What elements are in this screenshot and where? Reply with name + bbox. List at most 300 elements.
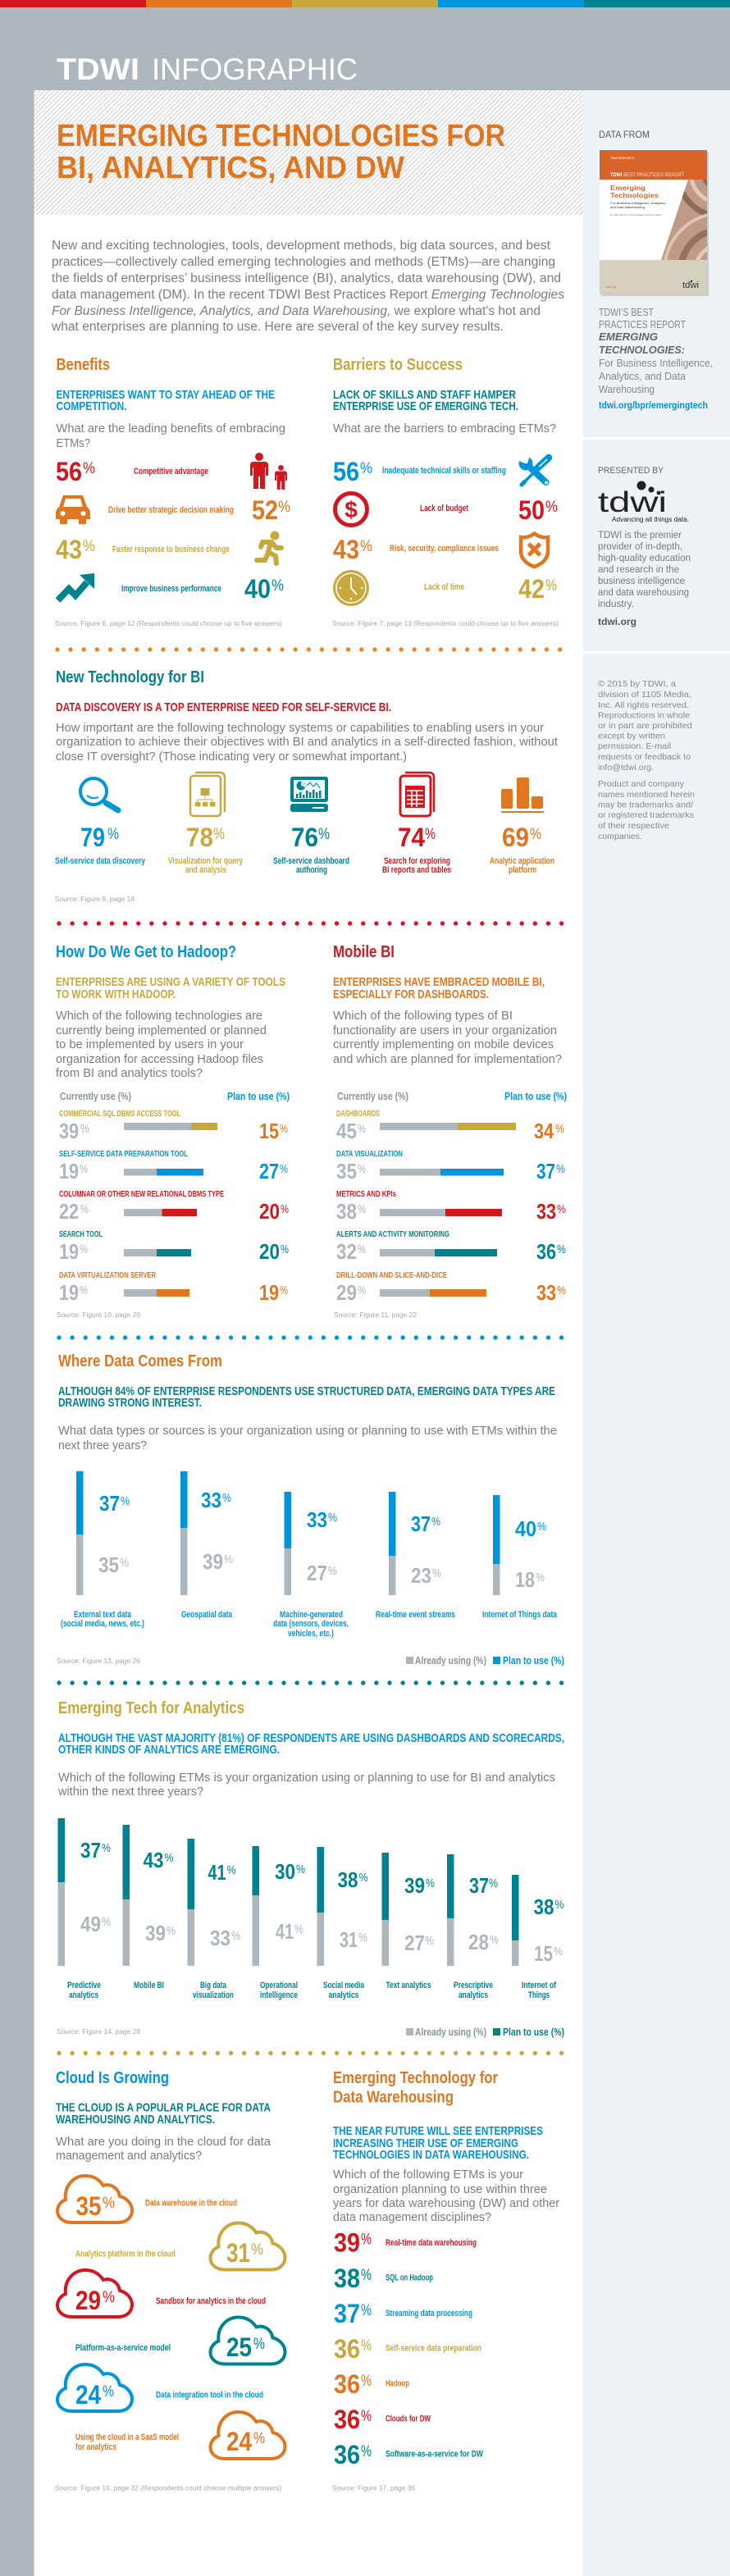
sidebar panel: presented by: and research in the xyxy=(598,565,679,575)
stat: Hadoop 36% xyxy=(334,2369,409,2399)
row: data visualization xyxy=(336,1149,565,1183)
bar: operational intelligence xyxy=(253,1846,305,2000)
source: benefits: Source: Figure 6, page 12 (Respondents could choose up to five answers) xyxy=(55,619,282,627)
sidebar panel: data from: Warehousing xyxy=(599,384,655,395)
question: cloud xyxy=(56,2135,271,2163)
report cover: TDWI BEST PRACTICES REPORT xyxy=(610,172,684,178)
subhead: analytics: OTHER KINDS OF ANALYTICS ARE EMERGING. xyxy=(58,1744,280,1757)
panel: new technology for BI xyxy=(55,668,559,903)
row: data visualization: DATA VISUALIZATION xyxy=(336,1149,403,1159)
stat: technical skills 56%: 56 xyxy=(333,457,359,486)
row: self-service data preparation: SELF-SERVICE DATA PREPARATION TOOL xyxy=(59,1149,188,1159)
subhead: data types xyxy=(58,1385,555,1410)
subhead: cloud xyxy=(56,2101,271,2127)
panel: emerging technology for data warehousing xyxy=(332,2069,559,2492)
panel: hadoop xyxy=(56,943,290,1319)
icon: dollar xyxy=(335,494,367,525)
cloud: sandbox 29%: Sandbox for analytics in the cloud xyxy=(156,2296,266,2306)
stat: streaming data processing 37%: % xyxy=(361,2302,372,2319)
stat: analytic application: % xyxy=(530,826,541,843)
subhead: benefits: ENTERPRISES WANT TO STAY AHEAD OF THE xyxy=(56,389,275,402)
row: commercial SQL: % xyxy=(280,1122,288,1136)
stat: SQL on Hadoop 38%: SQL on Hadoop xyxy=(386,2273,433,2283)
row: metrics and KPIs: % xyxy=(557,1202,566,1216)
bar: machine-generated data: % xyxy=(328,1564,337,1578)
cloud: sandbox 29%: % xyxy=(103,2289,115,2306)
cloud: data integration 24%: % xyxy=(103,2383,114,2400)
question: hadoop: from BI and analytics tools? xyxy=(56,1066,203,1080)
bar: big data visualization: % xyxy=(231,1929,240,1943)
heading: barriers: Barriers to Success xyxy=(333,356,463,374)
stat: Hadoop 36%: Hadoop xyxy=(386,2378,409,2388)
bar: prescriptive analytics: Prescriptive xyxy=(454,1981,493,1990)
tdwi logo xyxy=(598,481,689,523)
icon: clock xyxy=(333,570,369,606)
question: self-service: close IT oversight? (Those indicating very or somewhat important.) xyxy=(56,750,407,764)
cloud: data integration 24%: 24 xyxy=(75,2380,101,2410)
sidebar panel: presented by xyxy=(583,440,730,651)
colour stripe xyxy=(0,0,730,7)
question: hadoop: organization for accessing Hadoop files xyxy=(56,1052,263,1066)
bar: mobile BI: % xyxy=(167,1924,176,1938)
sidebar panel: copyright: companies. xyxy=(598,832,642,841)
row: dashboards: DASHBOARDS xyxy=(336,1109,380,1119)
subhead: cloud: WAREHOUSING AND ANALYTICS. xyxy=(56,2113,215,2127)
icon: document hierarchy xyxy=(190,773,225,816)
stat: self-service data discovery: 79 xyxy=(80,823,105,852)
subhead: data discovery: DATA DISCOVERY IS A TOP ENTERPRISE NEED FOR SELF-SERVICE BI. xyxy=(56,701,391,714)
report cover: and Data Warehousing xyxy=(610,205,645,209)
bar: machine-generated data: 33 xyxy=(307,1507,327,1532)
bar: text analytics: % xyxy=(425,1934,434,1948)
bar: social media analytics: 31 xyxy=(340,1927,358,1952)
icon: runner xyxy=(257,531,281,563)
row: columnar: 20 xyxy=(259,1199,280,1224)
sidebar panel: copyright: Reproductions in whole xyxy=(598,710,690,720)
stat: search: % xyxy=(425,826,436,843)
stat: dashboard authoring: 76 xyxy=(291,823,318,852)
icon: monitor dashboard xyxy=(290,777,328,812)
stat: streaming data processing 37%: Streaming data processing xyxy=(386,2309,472,2318)
row: commercial SQL: % xyxy=(80,1122,89,1136)
subhead: data warehousing: TECHNOLOGIES IN DATA WAREHOUSING. xyxy=(333,2149,529,2162)
bar: internet of things data: % xyxy=(536,1571,545,1584)
question: data warehousing: years for data warehousing (DW) and other xyxy=(333,2196,559,2210)
sidebar panel: copyright: permission. E-mail xyxy=(598,741,671,751)
question: data warehousing: data management disciplines? xyxy=(333,2210,491,2224)
cloud: data warehouse 35%: % xyxy=(103,2195,115,2212)
cloud: analytics platform 31% xyxy=(75,2223,285,2270)
heading: data warehousing: Data Warehousing xyxy=(333,2088,454,2106)
sidebar panel: data from: For Business Intelligence, xyxy=(599,358,713,369)
row: search tool: SEARCH TOOL xyxy=(59,1229,103,1239)
stat: Hadoop 36%: % xyxy=(361,2373,372,2390)
stat: strategic decision making 52%: 52 xyxy=(252,495,278,525)
legend: analytics: Already using (%) xyxy=(415,2026,486,2038)
stat: self-service data discovery: Self-service data discovery xyxy=(55,856,146,866)
question: cloud: What are you doing in the cloud for data xyxy=(56,2135,271,2149)
stat: dashboard authoring: Self-service dashboard xyxy=(273,856,349,866)
row: columnar: COLUMNAR OR OTHER NEW RELATIONAL DBMS TYPE xyxy=(59,1189,224,1199)
stat: faster response 43%: 43 xyxy=(56,535,82,564)
subhead: mobile BI: ENTERPRISES HAVE EMBRACED MOBILE BI, xyxy=(333,976,545,989)
bar: text analytics xyxy=(382,1853,435,1990)
bar: internet of things: Things xyxy=(528,1990,550,2000)
stat: visualization: and analysis xyxy=(185,865,226,875)
sidebar panel: presented by: and data warehousing xyxy=(598,588,689,598)
sidebar panel: copyright: except by written xyxy=(598,732,665,741)
question: barriers: What are the barriers to embracing ETMs? xyxy=(333,422,556,435)
stat: streaming data processing 37% xyxy=(334,2299,472,2328)
bar: operational intelligence: intelligence xyxy=(260,1990,298,2000)
stat: clouds for DW 36%: % xyxy=(361,2408,372,2425)
subhead: mobile BI: ESPECIALLY FOR DASHBOARDS. xyxy=(333,988,489,1001)
column headers: mobile BI xyxy=(337,1090,567,1102)
bar: geospatial data: Geospatial data xyxy=(181,1610,233,1620)
bar: mobile BI: 43 xyxy=(143,1848,164,1872)
row: alerts and activity monitoring: 36 xyxy=(536,1239,556,1264)
subhead: data types: DRAWING STRONG INTEREST. xyxy=(58,1397,202,1410)
subhead: data warehousing: THE NEAR FUTURE WILL SEE ENTERPRISES xyxy=(333,2125,543,2138)
stat: business performance 40%: Improve business performance xyxy=(121,584,221,594)
bar: mobile BI xyxy=(123,1825,176,1990)
row: self-service data preparation xyxy=(59,1149,288,1183)
stat: streaming data processing 37%: 37 xyxy=(334,2299,360,2328)
legend: analytics: Plan to use (%) xyxy=(503,2026,564,2038)
bar: machine-generated data xyxy=(273,1492,349,1639)
row: drill-down: DRILL-DOWN AND SLICE-AND-DICE xyxy=(336,1270,447,1280)
cloud: SaaS 24% xyxy=(75,2412,285,2459)
heading: where data comes from: Where Data Comes From xyxy=(58,1352,222,1370)
question: data types: What data types or sources is your organization using or planning to use with ETMs within the xyxy=(58,1424,557,1438)
bar: text analytics: Text analytics xyxy=(386,1981,431,1990)
stat: visualization: 78 xyxy=(186,823,213,852)
subhead: cloud: THE CLOUD IS A POPULAR PLACE FOR DATA xyxy=(56,2101,271,2114)
report cover: tdwi xyxy=(682,280,699,290)
icon: shield xyxy=(521,533,548,567)
question: analytics xyxy=(57,1771,555,1799)
sidebar panel: presented by: PRESENTED BY xyxy=(598,466,664,476)
question: cloud: management and analytics? xyxy=(56,2149,202,2163)
sidebar panel: data from: Analytics, and Data xyxy=(599,371,686,382)
stat: strategic decision making 52% xyxy=(108,495,290,525)
bar: internet of things: 38 xyxy=(533,1894,554,1919)
row: alerts and activity monitoring: ALERTS AND ACTIVITY MONITORING xyxy=(336,1229,449,1239)
bar: real-time event streams xyxy=(376,1492,455,1620)
masthead: TDWI Infographic: TDWI xyxy=(57,52,139,86)
stat: real-time data warehousing 39%: % xyxy=(361,2231,372,2249)
row: commercial SQL: 15 xyxy=(259,1119,279,1143)
bar: external text data: 35 xyxy=(98,1552,119,1577)
heading: data warehousing xyxy=(333,2069,498,2106)
title banner: BI, ANALYTICS, AND DW xyxy=(57,151,404,185)
row: metrics and KPIs: % xyxy=(358,1202,366,1216)
bar: external text data: External text data xyxy=(74,1610,132,1620)
bar: predictive analytics: % xyxy=(102,1915,111,1929)
stat: budget 50%: % xyxy=(545,499,558,516)
report cover: TDWI RESEARCH xyxy=(610,157,635,160)
row: dashboards: % xyxy=(555,1122,564,1136)
row: search tool: 20 xyxy=(259,1239,280,1264)
question: mobile BI: currently implementing on mobile devices xyxy=(333,1037,554,1051)
stat: faster response 43% xyxy=(56,535,230,564)
row: drill-down: % xyxy=(557,1283,566,1297)
sidebar panel: data from xyxy=(583,90,730,437)
question: hadoop: currently being implemented or planned xyxy=(56,1024,267,1037)
source: data warehousing: Source: Figure 17, page 36 xyxy=(332,2483,415,2492)
row: search tool: 19 xyxy=(59,1239,79,1264)
bar: social media analytics: Social media xyxy=(323,1981,365,1990)
cloud: data integration 24% xyxy=(57,2364,263,2411)
bar: operational intelligence: 41 xyxy=(276,1919,294,1944)
row: dashboards xyxy=(336,1109,564,1143)
stat: software-as-a-service for DW 36% xyxy=(334,2440,483,2469)
stat: search: Search for exploring xyxy=(384,856,450,866)
subhead: data types: ALTHOUGH 84% OF ENTERPRISE RESPONDENTS USE STRUCTURED DATA, EMERGING DATA TYPES ARE xyxy=(58,1385,555,1398)
sidebar panel: copyright: requests or feedback to xyxy=(598,752,691,762)
bar: internet of things data: 18 xyxy=(515,1567,535,1592)
cloud: platform as a service 25% xyxy=(75,2318,285,2364)
icon: upward arrow xyxy=(57,573,94,600)
stat: strategic decision making 52%: % xyxy=(278,499,290,516)
heading: cloud: Cloud Is Growing xyxy=(56,2069,169,2087)
sidebar panel: copyright: Product and company xyxy=(598,779,685,789)
title banner: EMERGING TECHNOLOGIES FOR xyxy=(57,119,505,153)
subhead: hadoop xyxy=(56,976,285,1001)
cloud: SaaS 24%: for analytics xyxy=(75,2442,116,2452)
stat: risk 43%: Risk, security, compliance issues xyxy=(390,544,499,554)
subhead: barriers: ENTERPRISE USE OF EMERGING TECH. xyxy=(333,400,518,413)
bar: machine-generated data: 27 xyxy=(307,1561,327,1585)
bar: social media analytics: % xyxy=(358,1931,367,1945)
source: hadoop: Source: Figure 10, page 20 xyxy=(57,1311,140,1319)
question: hadoop: to be implemented by users in your xyxy=(56,1037,244,1051)
intro text: what enterprises are planning to use. Here are several of the key survey results. xyxy=(51,320,504,334)
cloud: data integration 24%: Data integration tool in the cloud xyxy=(156,2390,263,2400)
bar: geospatial data: % xyxy=(224,1552,233,1566)
cloud: SaaS 24%: Using the cloud in a SaaS model xyxy=(75,2432,179,2442)
row: alerts and activity monitoring: 32 xyxy=(336,1239,357,1264)
bar: real-time event streams: 23 xyxy=(411,1563,431,1588)
bar: internet of things: Internet of xyxy=(522,1981,556,1990)
stat: software-as-a-service for DW 36%: % xyxy=(361,2443,372,2460)
sidebar panel: presented by: business intelligence xyxy=(598,577,685,586)
stat: time 42%: Lack of time xyxy=(424,582,464,592)
stat: analytic application: Analytic application xyxy=(490,856,554,866)
stat: budget 50%: Lack of budget xyxy=(420,504,468,513)
stat: dashboard authoring xyxy=(273,823,349,875)
bar: text analytics: 27 xyxy=(404,1931,425,1955)
subhead: mobile BI xyxy=(333,976,545,1001)
stat: real-time data warehousing 39% xyxy=(334,2227,477,2257)
row: dashboards: 45 xyxy=(336,1119,357,1143)
bar: predictive analytics: 49 xyxy=(80,1912,101,1936)
heading: new technology: New Technology for BI xyxy=(56,668,204,686)
bar: real-time event streams: Real-time event streams xyxy=(376,1610,455,1620)
source: barriers: Source: Figure 7, page 13 (Respondents could choose up to five answers) xyxy=(332,619,559,627)
row: data virtualization: 19 xyxy=(259,1280,279,1305)
question: data types: next three years? xyxy=(58,1438,147,1452)
bar: big data visualization: 41 xyxy=(208,1860,226,1885)
bar: social media analytics: 38 xyxy=(338,1867,358,1892)
sidebar panel: copyright: or registered trademarks xyxy=(598,810,694,820)
icon: wrench and screwdriver xyxy=(517,454,549,485)
row: drill-down: % xyxy=(358,1283,366,1297)
cloud: platform as a service 25%: Platform-as-a-service model xyxy=(75,2343,171,2353)
report cover: Emerging xyxy=(610,184,646,192)
subhead: benefits: COMPETITION. xyxy=(56,400,126,413)
bar: internet of things data: 40 xyxy=(515,1516,536,1541)
cloud: SaaS 24%: 24 xyxy=(226,2427,252,2456)
bar: external text data: 37 xyxy=(99,1491,120,1516)
stat: faster response 43%: Faster response to business change xyxy=(112,545,230,554)
bar: big data visualization: Big data xyxy=(200,1981,227,1990)
row: search tool xyxy=(59,1229,289,1264)
stat: business performance 40% xyxy=(121,574,284,604)
bar: operational intelligence: % xyxy=(294,1922,303,1936)
source: mobile BI: Source: Figure 11, page 22 xyxy=(334,1311,417,1319)
sidebar panel: presented by: tdwi.org xyxy=(598,616,636,627)
stat: search xyxy=(382,823,451,875)
panel: barriers xyxy=(332,356,559,627)
column headers: hadoop xyxy=(60,1090,290,1102)
bar: operational intelligence: % xyxy=(296,1862,305,1876)
row: drill-down: 29 xyxy=(336,1280,357,1305)
stat: dashboard authoring: authoring xyxy=(296,865,327,875)
bar: mobile BI: 39 xyxy=(145,1921,166,1945)
bar: geospatial data: 33 xyxy=(201,1488,221,1512)
bar: prescriptive analytics xyxy=(447,1854,499,2000)
row: drill-down: 33 xyxy=(536,1280,556,1305)
stat: technical skills 56%: Inadequate technical skills or staffing xyxy=(382,466,506,476)
bar: predictive analytics: 37 xyxy=(80,1838,101,1862)
icon: calculator xyxy=(400,773,434,816)
stat: visualization: % xyxy=(213,826,225,843)
row: data visualization: % xyxy=(556,1162,565,1176)
source: cloud: Source: Figure 16, page 32 (Respondents could choose multiple answers) xyxy=(55,2483,281,2492)
question: benefits xyxy=(56,422,285,450)
column headers: hadoop: Plan to use (%) xyxy=(227,1090,290,1102)
stat: self-service data preparation 36%: Self-service data preparation xyxy=(386,2344,481,2354)
cloud: analytics platform 31%: Analytics platform in the cloud xyxy=(75,2249,176,2259)
stat: self-service data preparation 36%: % xyxy=(361,2337,372,2355)
column headers: mobile BI: Plan to use (%) xyxy=(504,1090,567,1102)
bar: mobile BI: % xyxy=(164,1851,174,1865)
stat: competitive advantage 56%: % xyxy=(83,460,95,477)
intro text: For Business Intelligence, Analytics, and Data Warehousing, we explore what’s hot and xyxy=(52,304,541,318)
stat: real-time data warehousing 39%: 39 xyxy=(334,2227,360,2257)
bar: machine-generated data: % xyxy=(328,1511,337,1525)
question: mobile BI: functionality are users in your organization xyxy=(333,1024,557,1037)
heading: analytics: Emerging Tech for Analytics xyxy=(58,1699,244,1717)
bar: external text data: % xyxy=(121,1494,130,1508)
legend: data sources: Plan to use (%) xyxy=(503,1654,564,1666)
stat: SQL on Hadoop 38%: % xyxy=(361,2267,372,2284)
subhead: barriers: LACK OF SKILLS AND STAFF HAMPER xyxy=(333,389,516,402)
stat: strategic decision making 52%: Drive better strategic decision making xyxy=(108,505,234,515)
row: metrics and KPIs: 38 xyxy=(336,1199,357,1224)
subhead: barriers xyxy=(333,389,518,413)
stat: analytic application xyxy=(490,823,554,875)
stat: search: BI reports and tables xyxy=(382,865,451,875)
bar: social media analytics: analytics xyxy=(328,1990,359,2000)
stat: faster response 43%: % xyxy=(83,538,95,555)
legend: analytics xyxy=(406,2026,564,2038)
bar: internet of things data: % xyxy=(537,1520,546,1534)
stat: Hadoop 36%: 36 xyxy=(334,2369,360,2399)
bar: internet of things: % xyxy=(554,1945,563,1958)
subhead: analytics xyxy=(58,1732,564,1757)
bar: machine-generated data: data (sensors, devices, xyxy=(273,1619,349,1629)
panel: where data comes from xyxy=(57,1352,564,1666)
masthead: TDWI Infographic xyxy=(57,52,358,86)
stat: competitive advantage 56%: Competitive advantage xyxy=(134,467,208,476)
sidebar panel: data from: tdwi.org/bpr/emergingtech xyxy=(599,399,708,411)
cloud: analytics platform 31%: % xyxy=(251,2241,263,2259)
row: data virtualization xyxy=(59,1270,288,1305)
row: alerts and activity monitoring: % xyxy=(557,1242,566,1256)
cloud: data warehouse 35%: Data warehouse in the cloud xyxy=(145,2198,237,2208)
stat: time 42%: 42 xyxy=(518,574,545,604)
bar: prescriptive analytics: % xyxy=(490,1933,499,1947)
subhead: data warehousing xyxy=(333,2125,543,2162)
report cover: tdwi.org xyxy=(606,285,616,289)
sidebar panel: copyright: © 2015 by TDWI, a xyxy=(598,679,676,689)
cloud: sandbox 29%: 29 xyxy=(75,2286,101,2315)
stat: technical skills 56% xyxy=(333,457,506,486)
source: data: Source: Figure 13, page 26 xyxy=(57,1657,140,1665)
bar: machine-generated data: vehicles, etc.) xyxy=(288,1629,334,1639)
row: commercial SQL xyxy=(59,1109,288,1143)
cloud: sandbox 29% xyxy=(57,2270,266,2317)
stat: software-as-a-service for DW 36%: Software-as-a-service for DW xyxy=(386,2449,483,2459)
heading: hadoop: How Do We Get to Hadoop? xyxy=(56,943,236,961)
bar: geospatial data: % xyxy=(222,1491,231,1505)
stat: real-time data warehousing 39%: Real-time data warehousing xyxy=(386,2238,477,2248)
sidebar panel: presented by: provider of in-depth, xyxy=(598,542,682,552)
bar: internet of things xyxy=(512,1875,564,2000)
stat: analytic application: platform xyxy=(509,865,536,875)
panel: mobile BI xyxy=(333,943,567,1319)
panel: benefits xyxy=(55,356,290,627)
question: self-service xyxy=(56,721,559,764)
stat: risk 43%: % xyxy=(360,538,372,555)
row: self-service data preparation: 19 xyxy=(59,1159,79,1183)
stat: SQL on Hadoop 38% xyxy=(334,2264,433,2293)
bar: predictive analytics xyxy=(57,1818,111,2000)
tdwi logo: Advancing all things data. xyxy=(612,516,689,523)
row: columnar: % xyxy=(281,1202,289,1216)
icon: adult and child xyxy=(250,453,287,490)
row: search tool: % xyxy=(80,1242,88,1256)
heading: mobile BI: Mobile BI xyxy=(333,943,395,961)
question: data warehousing: organization planning to use within three xyxy=(333,2182,547,2196)
cloud: data warehouse 35% xyxy=(57,2176,237,2223)
stat: clouds for DW 36%: Clouds for DW xyxy=(386,2414,431,2424)
panel: cloud is growing xyxy=(55,2069,285,2492)
stat: self-service data discovery: % xyxy=(107,826,119,843)
bar: big data visualization: visualization xyxy=(193,1990,234,2000)
heading: benefits: Benefits xyxy=(56,356,110,374)
question: mobile BI xyxy=(333,1009,562,1066)
stat: time 42%: % xyxy=(545,577,557,595)
bar: external text data xyxy=(61,1471,144,1629)
sidebar panel: presented by: high-quality education xyxy=(598,554,691,563)
bar: external text data: % xyxy=(120,1556,129,1570)
intro text: the fields of enterprises’ business intelligence (BI), analytics, data warehousing (DW), and xyxy=(52,271,561,285)
sidebar panel: copyright: division of 1105 Media, xyxy=(598,690,691,700)
sidebar panel: data from: DATA FROM xyxy=(599,129,650,140)
